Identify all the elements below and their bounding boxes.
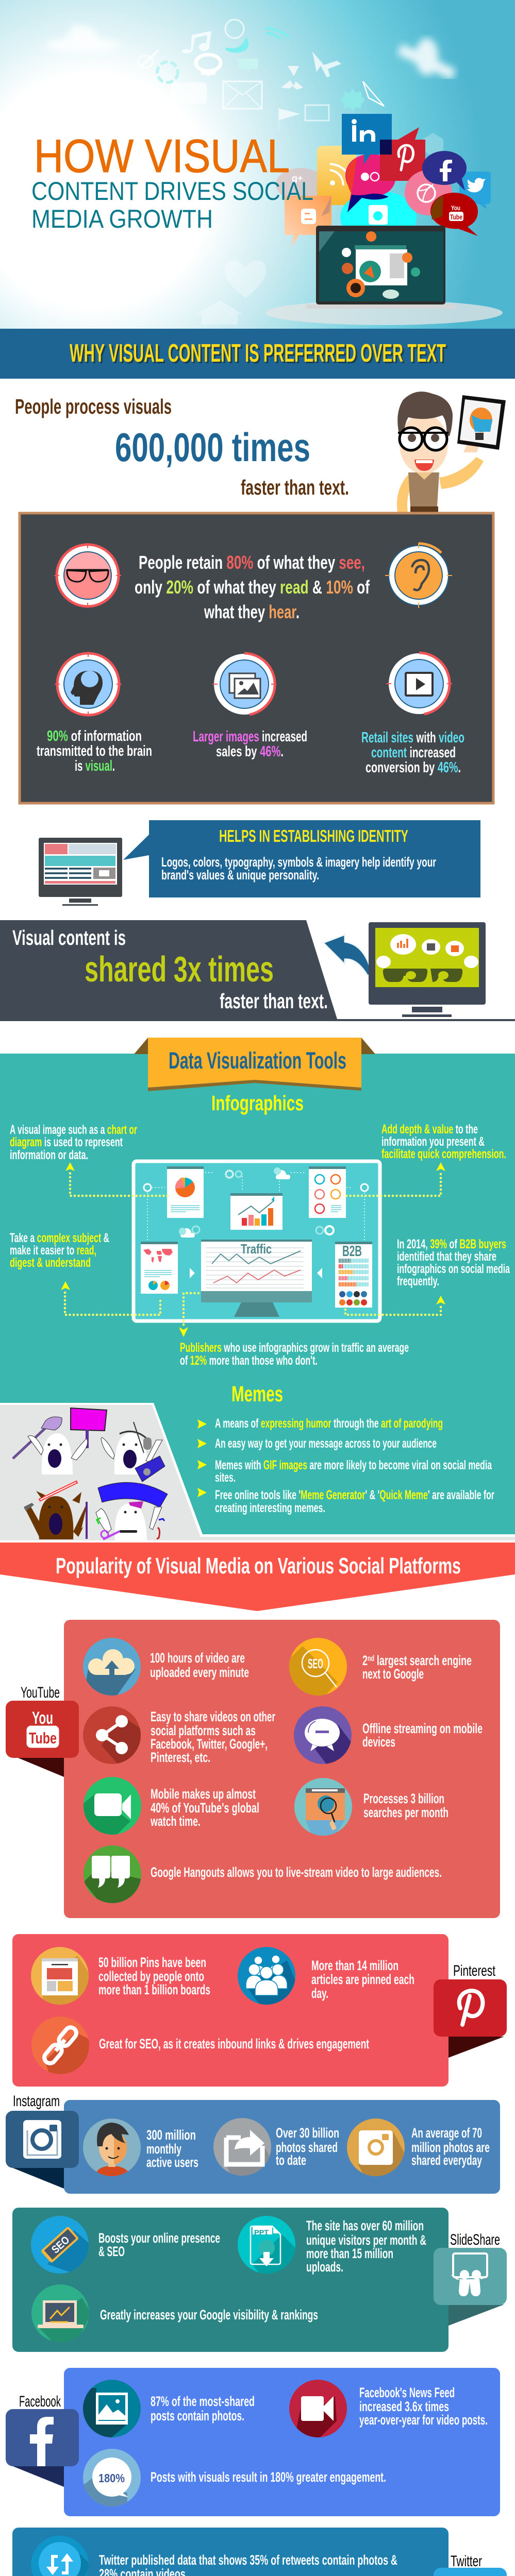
- meme: ghost with radio: [101, 1422, 165, 1482]
- hero panel: [0, 0, 515, 330]
- list: meme facts: sites.: [215, 1470, 236, 1485]
- illustration: man holding tablet: [397, 392, 506, 512]
- panel: pinterest: [12, 1934, 507, 2087]
- text block: people process visuals: [15, 395, 349, 499]
- text: mobile makes up: Mobile makes up almost: [151, 1786, 256, 1802]
- text: 2nd largest: nd: [368, 1654, 374, 1663]
- hero title: CONTENT DRIVES SOCIAL: [31, 177, 313, 206]
- text: easy to share: social platforms such as: [151, 1723, 256, 1738]
- list: meme facts: creating interesting memes.: [215, 1501, 325, 1515]
- text: site over 60 million: The site has over 60 million: [306, 2218, 424, 2233]
- icon: seo tag: [31, 2216, 91, 2276]
- icon: seo magnifier: SEO: [308, 1656, 323, 1671]
- icon: laptop chart: [31, 2284, 91, 2344]
- label: instagram: Instagram: [13, 2093, 60, 2110]
- icon: pinterest bubble: [380, 127, 425, 181]
- icon: youtube bubble: [430, 193, 478, 236]
- text: 14 million articles: [311, 1958, 414, 2001]
- text: retail sites: conversion by 46%.: [366, 759, 461, 776]
- text: complex subject: digest & understand: [10, 1256, 91, 1270]
- text: average 70 million: [411, 2125, 490, 2168]
- hero title: HOW VISUAL: [34, 130, 290, 182]
- small flow arrows: [190, 1268, 322, 1278]
- meme: ghost with shovel and sign: [13, 1408, 107, 1475]
- text: 90 percent: transmitted to the brain: [37, 743, 152, 759]
- panel: twitter: [12, 2528, 507, 2576]
- document with world map: [141, 1242, 178, 1294]
- icon: ear: [385, 543, 452, 608]
- text: retweets contain photos: [99, 2552, 397, 2576]
- banner: popularity of visual media: [0, 1543, 515, 1611]
- hero title: [31, 130, 313, 233]
- text: visual image definition: diagram is used to represent: [10, 1135, 123, 1149]
- text block: people process visuals: 600,000 times: [115, 425, 310, 470]
- panel: instagram: [6, 2093, 500, 2194]
- text: 100 hours: uploaded every minute: [150, 1665, 249, 1680]
- text: 14 million articles: day.: [311, 1986, 328, 2001]
- text: posts with visuals: Posts with visuals result in 180% greater engagement.: [151, 2469, 386, 2485]
- text: 300 million: monthly: [146, 2141, 181, 2157]
- label: youtube: YouTube: [21, 1684, 60, 1701]
- text: complex subject: [10, 1231, 109, 1270]
- text: publishers: of 12% more than those who don't.: [180, 1353, 318, 1368]
- icon: curved arrow: [323, 935, 372, 976]
- icon: linkedin square: [342, 114, 392, 165]
- text: larger images: [193, 728, 307, 760]
- panel: slideshare: [12, 2208, 507, 2352]
- text: processes 3 billion: searches per month: [363, 1805, 448, 1820]
- text: facebook news feed: increased 3.6x times: [359, 2399, 449, 2414]
- text: 50 billion pins: 50 billion Pins have been: [98, 1955, 206, 1970]
- icon: globe magnifier: [294, 1778, 352, 1838]
- text: site over 60 million: more than 15 million: [306, 2246, 393, 2261]
- text: boosts online presence: Boosts your online presence: [98, 2230, 220, 2246]
- text: 90 percent: is visual.: [75, 758, 115, 774]
- icon: instagram logo circle: [347, 2119, 407, 2178]
- icon: share: [83, 1706, 143, 1766]
- logo: youtube: You: [32, 1708, 53, 1728]
- icon: youtube bubble: Tube: [450, 213, 462, 221]
- icon: share box: [213, 2118, 273, 2178]
- text: over 30 billion: to date: [276, 2153, 306, 2168]
- panel: blackboard: [20, 513, 493, 803]
- icon: blogger bubble: [285, 196, 331, 247]
- icon: quotation marks: [84, 1845, 143, 1905]
- laptop illustration: [306, 226, 456, 309]
- icon: instagram circle: [340, 191, 417, 244]
- icon: retweet bubble: [31, 2536, 91, 2576]
- icon: brain: [55, 652, 122, 717]
- icon: video camera: [84, 1777, 141, 1837]
- text: easy to share: Pinterest, etc.: [151, 1750, 210, 1765]
- logo: twitter: [434, 2568, 507, 2576]
- icon: twitter bubble: [459, 172, 491, 209]
- icon: dribbble circle: [405, 170, 452, 215]
- b2b document: [335, 1242, 372, 1308]
- text: processes 3 billion: [363, 1791, 448, 1820]
- text: over 30 billion: Over 30 billion: [276, 2125, 339, 2141]
- logo: facebook: [6, 2409, 79, 2487]
- list: meme facts: [197, 1416, 494, 1515]
- icon: video: [289, 2380, 347, 2439]
- text: site over 60 million: unique visitors per month &: [306, 2232, 426, 2248]
- text: b2b buyers: [397, 1237, 510, 1289]
- text: offline streaming: devices: [362, 1734, 395, 1750]
- text: 300 million: [146, 2127, 198, 2170]
- arrowheads: [61, 1162, 445, 1337]
- icon: offline bubble: [294, 1706, 354, 1766]
- text: publishers: Publishers who use infographics grow in traffic an average: [180, 1341, 409, 1355]
- text: b2b buyers: frequently.: [397, 1274, 439, 1289]
- panel: helps in establishing identity: HELPS IN ESTABLISHING IDENTITY: [219, 826, 408, 845]
- chart: infographic monitor: [134, 1161, 380, 1321]
- panel: shared 3x times: faster than text.: [220, 989, 328, 1013]
- text: visual image definition: information or data.: [10, 1148, 88, 1162]
- text: mobile makes up: watch time.: [150, 1814, 201, 1829]
- icon: ppt document: PPT: [254, 2228, 269, 2236]
- icon: cloud upload: [83, 1638, 141, 1696]
- label: pinterest: Pinterest: [453, 1962, 495, 1979]
- text: 90 percent: 90% of information: [47, 728, 142, 744]
- icon: group of people: [238, 1947, 297, 2007]
- text: site over 60 million: uploads.: [306, 2259, 343, 2275]
- text: 14 million articles: More than 14 million: [311, 1958, 398, 1973]
- icon: flickr bubble: [345, 154, 396, 212]
- text: easy to share: [151, 1709, 275, 1765]
- list: meme facts: A means of expressing humor through the art of parodying: [215, 1416, 443, 1431]
- text: over 30 billion: [276, 2125, 339, 2168]
- panel: helps in establishing identity: brand's values & unique personality.: [161, 867, 319, 883]
- panel: shared 3x times: Visual content is: [12, 926, 126, 950]
- text: people retain: only 20% of what they read & 10% of: [135, 577, 370, 598]
- icon: monitor layout: [39, 838, 122, 906]
- heading: memes: Memes: [231, 1382, 283, 1406]
- text: 300 million: active users: [146, 2155, 198, 2170]
- text: over 30 billion: photos shared: [276, 2140, 338, 2155]
- text: facebook news feed: Facebook's News Feed: [359, 2385, 455, 2400]
- text: boosts online presence: [98, 2230, 220, 2259]
- text: 2nd largest: next to Google: [362, 1666, 424, 1682]
- text: people retain: [135, 552, 370, 622]
- meme: brown character with saber: [24, 1482, 88, 1539]
- text: people retain: what they hear.: [204, 601, 300, 622]
- text: publishers: [180, 1341, 409, 1368]
- text: add depth and value: Add depth & value to the: [381, 1122, 478, 1137]
- illustration: meme characters: [0, 1403, 515, 1540]
- text: 100 hours: [150, 1650, 249, 1680]
- text: 300 million: 300 million: [146, 2127, 196, 2143]
- text: processes 3 billion: Processes 3 billion: [363, 1791, 444, 1806]
- arrows: dotted yellow connectors: [65, 1172, 441, 1325]
- icon: photo: [81, 2380, 141, 2439]
- text: site over 60 million: [306, 2218, 426, 2275]
- icon: seo tag: SEO: [49, 2234, 72, 2256]
- ribbon: data visualization tools: [134, 1038, 375, 1091]
- label: twitter: Twitter: [451, 2553, 482, 2570]
- text: 14 million articles: articles are pinned each: [311, 1972, 414, 1987]
- text: 50 billion pins: collected by people onto: [98, 1969, 204, 1984]
- text: 50 billion pins: more than 1 billion boards: [98, 1982, 210, 1997]
- icon: google plus bubble: [276, 168, 325, 201]
- icon: pictures: [212, 653, 276, 715]
- text block: people process visuals: faster than text.: [241, 476, 349, 499]
- icon: blurred cloud left: [45, 24, 120, 53]
- panel: facebook: [6, 2368, 500, 2516]
- faint globe of icons: [36, 20, 503, 325]
- document with pie chart: [167, 1166, 204, 1218]
- icon: youtube bubble: You: [451, 204, 460, 212]
- document with bar chart: [230, 1193, 283, 1230]
- section background: data visualization tools: [0, 1054, 515, 1535]
- text: larger images: Larger images increased: [193, 728, 307, 745]
- text: retail sites: Retail sites with video: [361, 730, 464, 746]
- meme: graduate with party blower: [96, 1482, 168, 1540]
- icon: ppt document: [238, 2216, 297, 2276]
- text: 2nd largest: [362, 1653, 472, 1682]
- section band: why visual content: [0, 329, 515, 379]
- traffic line chart screen: [201, 1240, 312, 1317]
- text: 87 percent: [151, 2394, 255, 2424]
- text: complex subject: make it easier to read,: [10, 1243, 96, 1258]
- icon: seo magnifier: [289, 1638, 347, 1698]
- icon: rss bubble: [317, 146, 356, 205]
- text: offline streaming: [362, 1721, 483, 1750]
- panel: shared 3x times: shared 3x times: [85, 949, 274, 989]
- panel: youtube: [6, 1620, 500, 1918]
- b2b document: B2B: [342, 1243, 362, 1260]
- text: visual image definition: [10, 1123, 137, 1162]
- icon: 180 percent bubble: 180%: [98, 2471, 125, 2485]
- icon: video play: [386, 653, 452, 714]
- logo: youtube: Tube: [29, 1729, 57, 1747]
- text: 50 billion pins: [98, 1955, 210, 1997]
- heading: infographics: Infographics: [211, 1091, 304, 1115]
- text: mobile makes up: [150, 1786, 259, 1829]
- panel: helps in establishing identity: [123, 820, 480, 897]
- text: 87 percent: posts contain photos.: [151, 2408, 244, 2424]
- text: easy to share: Facebook, Twitter, Google+,: [151, 1736, 268, 1752]
- label: facebook: Facebook: [19, 2393, 61, 2410]
- text: mobile makes up: 40% of YouTube's global: [151, 1800, 259, 1816]
- gears and clouds: [144, 1171, 368, 1242]
- icon: 180 percent bubble: [83, 2449, 141, 2509]
- text: easy to share: Easy to share videos on other: [151, 1709, 275, 1724]
- icon: facebook bubble: [422, 151, 467, 191]
- logo: youtube: [6, 1701, 79, 1777]
- text block: people process visuals: People process visuals: [15, 395, 172, 418]
- logo: instagram: [6, 2111, 79, 2168]
- text: 2nd largest: 2: [362, 1653, 370, 1668]
- text: facebook news feed: [359, 2385, 488, 2428]
- logo: pinterest: [434, 1979, 507, 2058]
- icon: user face: [83, 2119, 141, 2181]
- text: 100 hours: 100 hours of video are: [150, 1650, 245, 1666]
- logo: slideshare: [434, 2248, 507, 2326]
- icon: blurred cloud right: [400, 38, 454, 75]
- text: complex subject: Take a complex subject &: [10, 1231, 109, 1245]
- panel: shared 3x times: [0, 920, 515, 1021]
- text: great for seo: Great for SEO, as it creates inbound links & drives engagement: [99, 2036, 369, 2052]
- text: visual image definition: A visual image such as a chart or: [10, 1123, 137, 1137]
- icon: web page: [31, 1947, 91, 2007]
- icon: chain link: [31, 2016, 91, 2076]
- text: google visibility: Greatly increases your Google visibility & rankings: [100, 2307, 318, 2323]
- text: larger images: sales by 46%.: [216, 743, 284, 760]
- text: people retain: People retain 80% of what they see,: [139, 552, 365, 573]
- ribbon: data visualization tools: Data Visualization Tools: [169, 1047, 346, 1074]
- icon: glasses: [54, 543, 121, 608]
- text: 90 percent: [37, 728, 152, 774]
- text: retail sites: [361, 730, 464, 776]
- icon: monitor with social bubbles: [369, 922, 486, 1017]
- text: retail sites: content increased: [371, 744, 456, 761]
- traffic line chart screen: Traffic: [241, 1241, 272, 1257]
- icon: google plus bubble: g+: [292, 173, 303, 183]
- text: add depth and value: [381, 1122, 506, 1161]
- text: 87 percent: 87% of the most-shared: [151, 2394, 255, 2409]
- hero title: MEDIA GROWTH: [31, 205, 213, 233]
- text: boosts online presence: & SEO: [98, 2244, 125, 2259]
- document with arrows: [309, 1166, 346, 1218]
